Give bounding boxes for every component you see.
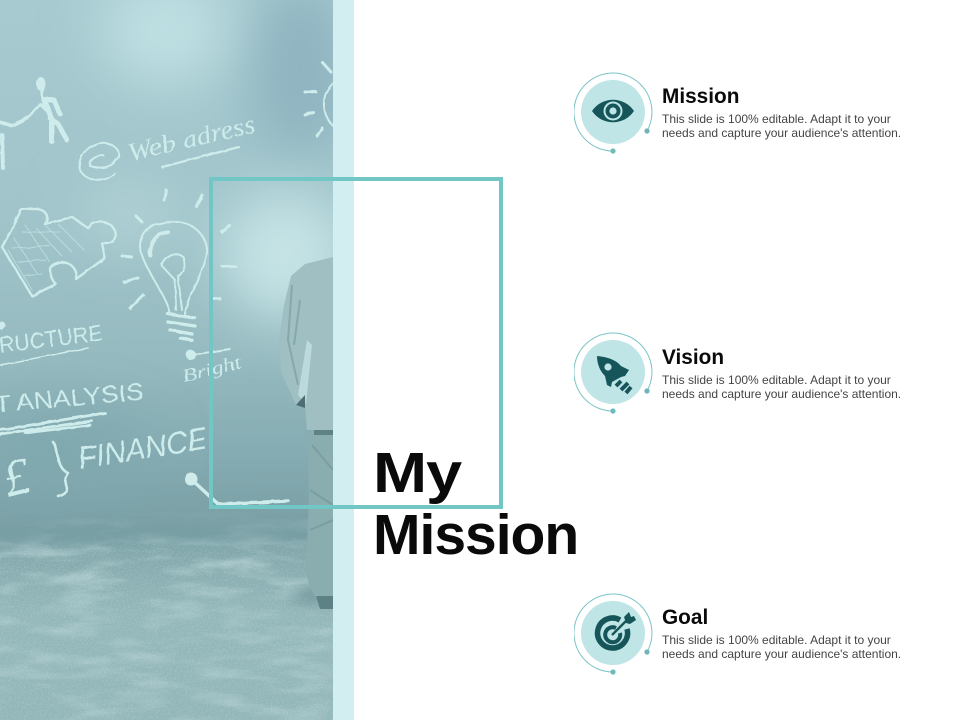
trouser folds — [310, 445, 333, 530]
horizon haze — [0, 527, 350, 541]
icon: rocket in ringed circle — [574, 332, 652, 414]
title: My — [373, 441, 461, 505]
text: mission description: needs and capture your audience's attention. — [662, 126, 901, 140]
text: goal description: needs and capture your audience's attention. — [662, 647, 901, 661]
chalk: sun at top right — [305, 63, 333, 136]
chalk sketches — [0, 63, 333, 504]
text: vision description: needs and capture your audience's attention. — [662, 387, 901, 401]
chalk: at sign — [79, 143, 119, 180]
chalk text: web address: Web adress — [125, 111, 258, 167]
shoe — [316, 596, 333, 609]
chalk text: bright: Bright — [180, 352, 244, 386]
chalk: puzzle piece — [2, 209, 116, 296]
ground blotches — [0, 510, 333, 720]
text: goal description: This slide is 100% editable. Adapt it to your — [662, 633, 891, 647]
heading: goal: Goal — [662, 606, 708, 629]
chalk: people shaking hands — [0, 77, 67, 168]
chalk: brace — [53, 442, 68, 496]
title — [373, 441, 578, 567]
item: vision — [574, 332, 901, 414]
light teal vertical strip — [333, 0, 354, 720]
businessman — [279, 257, 350, 609]
chalk text: structure: RUCTURE — [0, 319, 104, 358]
icon: eye in ringed circle — [574, 72, 652, 154]
text: mission description: This slide is 100% editable. Adapt it to your — [662, 112, 891, 126]
belt shadow — [314, 430, 333, 435]
text: vision description: This slide is 100% editable. Adapt it to your — [662, 373, 891, 387]
ground shadow — [290, 584, 350, 608]
ground grain — [0, 534, 333, 720]
text: vision description — [662, 373, 901, 401]
icon: target with arrow in ringed circle — [574, 594, 652, 675]
chalk: light bulb — [122, 190, 236, 340]
chalk text: finance: FINANCE — [76, 421, 210, 476]
panel: chalkboard photo of businessman — [0, 0, 333, 720]
chalk: underlines and pointers — [0, 348, 88, 365]
text: goal description — [662, 633, 901, 661]
chalk labels — [0, 111, 258, 509]
ground texture — [0, 510, 333, 720]
trousers — [306, 428, 333, 600]
title: Mission — [373, 503, 578, 567]
item: mission — [574, 72, 901, 154]
heading: mission: Mission — [662, 85, 739, 108]
teal outlined frame — [209, 177, 503, 509]
arm shadow — [298, 340, 312, 404]
chalk: web address underline — [162, 147, 239, 167]
item: goal — [574, 594, 901, 675]
jacket — [279, 257, 333, 430]
sky background — [0, 0, 333, 720]
clouds — [0, 0, 350, 485]
heading: vision: Vision — [662, 346, 724, 369]
sleeve folds — [288, 285, 300, 385]
text: mission description — [662, 112, 901, 140]
